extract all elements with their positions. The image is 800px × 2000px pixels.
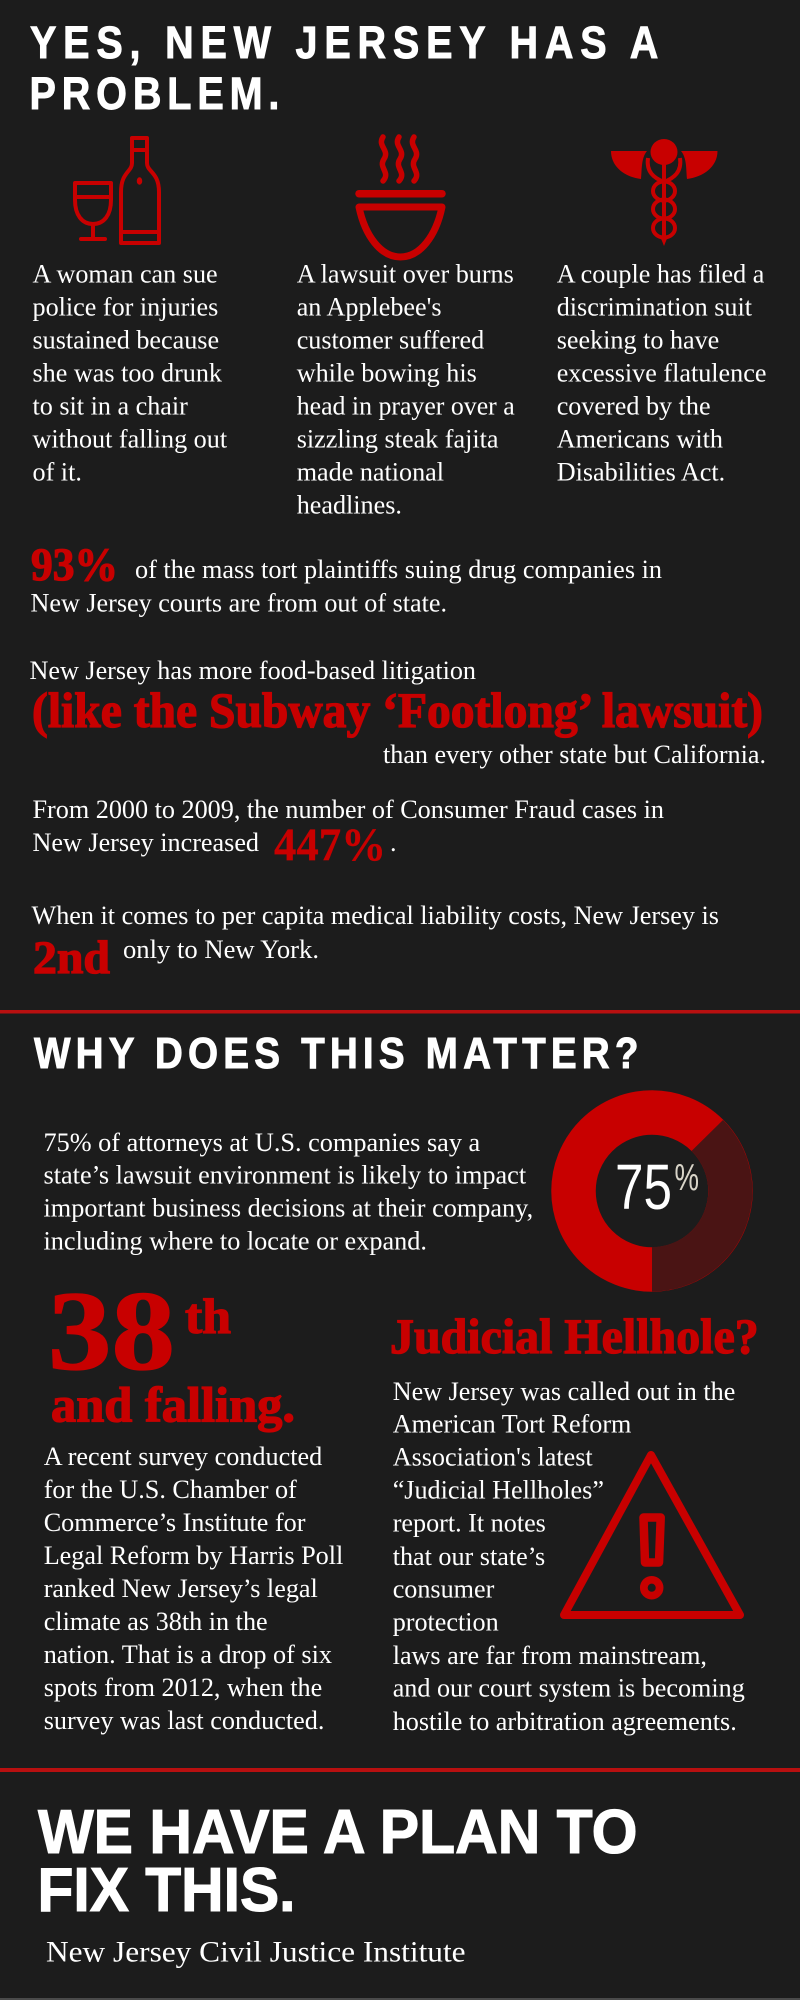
stat: 447 percent: From 2000 to 2009, the number of Consumer Fraud cases in xyxy=(32,795,664,824)
stat: 93 percent: of the mass tort plaintiffs suing drug companies in xyxy=(135,555,662,584)
stat: 93 percent: 93% xyxy=(31,539,118,591)
panel: the problem xyxy=(30,18,766,984)
text: flatulence suit: Disabilities Act. xyxy=(557,457,725,486)
stat: food-based litigation xyxy=(30,656,766,769)
text: applebee's lawsuit: headlines. xyxy=(297,490,402,519)
text: flatulence suit: discrimination suit xyxy=(557,292,753,321)
text: harris poll survey: Legal Reform by Harris Poll xyxy=(44,1541,343,1570)
text: harris poll survey: A recent survey conducted xyxy=(44,1442,322,1471)
text: applebee's lawsuit: A lawsuit over burns xyxy=(297,259,514,288)
heading: why does this matter: WHY DOES THIS MATTER? xyxy=(34,1028,639,1078)
text: judicial hellholes report: laws are far from mainstream, xyxy=(393,1641,707,1670)
text: woman sues police: police for injuries xyxy=(32,292,218,321)
stat: 38th and falling: th xyxy=(185,1288,231,1344)
stat: 447 percent: New Jersey increased xyxy=(32,828,259,857)
chart: 75 percent donut: 75 xyxy=(615,1151,672,1223)
icon: warning triangle xyxy=(564,1455,740,1615)
text: flatulence suit: covered by the xyxy=(557,391,711,420)
text: judicial hellholes report: American Tort Reform xyxy=(393,1410,631,1439)
text: 75 percent of attorneys: state’s lawsuit environment is likely to impact xyxy=(44,1161,527,1190)
text: harris poll survey: ranked New Jersey’s legal xyxy=(44,1574,318,1603)
stat: 447 percent xyxy=(32,795,664,871)
text: harris poll survey: Commerce’s Institute for xyxy=(44,1508,306,1537)
heading: yes, new jersey has a problem: PROBLEM. xyxy=(30,69,279,119)
text: woman sues police: of it. xyxy=(32,457,82,486)
text: flatulence suit: excessive flatulence xyxy=(557,358,766,387)
text: judicial hellholes report: protection xyxy=(393,1608,499,1637)
text: harris poll survey: climate as 38th in the xyxy=(44,1607,268,1636)
heading: we have a plan to fix this: FIX THIS. xyxy=(38,1856,296,1925)
stat: 38th and falling: 38 xyxy=(48,1269,175,1394)
icon: wine glass and bottle xyxy=(75,138,159,243)
text: 75 percent of attorneys: including where to locate or expand. xyxy=(44,1226,427,1255)
text: applebee's lawsuit: an Applebee's xyxy=(297,292,442,321)
heading: yes, new jersey has a problem xyxy=(30,18,658,119)
icon: caduceus xyxy=(611,139,718,246)
stat: 447 percent: 447% xyxy=(274,819,386,871)
stat: 38th and falling: and falling. xyxy=(51,1377,295,1433)
text: 75 percent of attorneys: important business decisions at their company, xyxy=(44,1194,533,1222)
text: judicial hellholes report: that our state’s xyxy=(393,1542,545,1571)
text: judicial hellholes report: report. It notes xyxy=(393,1509,546,1538)
text: flatulence suit: seeking to have xyxy=(557,325,719,354)
text: applebee's lawsuit: while bowing his xyxy=(297,358,477,387)
stat: 2nd in medical liability costs: only to New York. xyxy=(123,935,319,964)
text: judicial hellholes report: “Judicial Hellholes” xyxy=(393,1475,604,1504)
heading: we have a plan to fix this: WE HAVE A PLAN TO xyxy=(38,1798,638,1867)
text: applebee's lawsuit: made national xyxy=(297,457,444,486)
text: 75 percent of attorneys: 75% of attorneys at U.S. companies say a xyxy=(44,1128,481,1157)
stat: food-based litigation: (like the Subway ‘Footlong’ lawsuit) xyxy=(32,682,763,738)
panel: why does this matter xyxy=(34,1028,759,1736)
heading: yes, new jersey has a problem: YES, NEW JERSEY HAS A xyxy=(30,18,658,68)
text: judicial hellholes report: New Jersey was called out in the xyxy=(393,1377,735,1406)
chart: 75 percent donut xyxy=(574,1112,752,1292)
icon: steaming bowl xyxy=(359,137,442,257)
text: flatulence suit: A couple has filed a xyxy=(557,259,765,288)
text: harris poll survey: spots from 2012, when the xyxy=(44,1673,322,1702)
text: judicial hellholes report: consumer xyxy=(393,1575,495,1604)
text: flatulence suit: Americans with xyxy=(557,424,723,453)
text: organisation name: New Jersey Civil Justice Institute xyxy=(46,1936,466,1969)
text: woman sues police: A woman can sue xyxy=(32,259,218,288)
text: judicial hellholes report: and our court system is becoming xyxy=(393,1674,745,1703)
text: harris poll survey: nation. That is a drop of six xyxy=(44,1640,332,1669)
stat: 2nd in medical liability costs: 2nd xyxy=(33,932,110,984)
stat: 447 percent: . xyxy=(390,828,397,857)
text: woman sues police: to sit in a chair xyxy=(32,391,188,420)
panel: we have a plan xyxy=(38,1798,638,1969)
stat: 2nd in medical liability costs xyxy=(32,901,719,984)
text: applebee's lawsuit: customer suffered xyxy=(297,325,484,354)
text: applebee's lawsuit: head in prayer over a xyxy=(297,391,515,420)
text: judicial hellholes report: hostile to arbitration agreements. xyxy=(393,1707,737,1736)
stat: food-based litigation: than every other state but California. xyxy=(383,740,766,769)
stat: 93 percent xyxy=(30,539,662,618)
text: woman sues police: sustained because xyxy=(32,325,219,354)
text: harris poll survey: survey was last conducted. xyxy=(44,1706,324,1735)
text: harris poll survey: for the U.S. Chamber of xyxy=(44,1475,297,1504)
stat: 93 percent: New Jersey courts are from out of state. xyxy=(30,588,447,618)
text: woman sues police: she was too drunk xyxy=(32,358,223,387)
stat: 2nd in medical liability costs: When it comes to per capita medical liability costs, New Jersey is xyxy=(32,901,719,930)
text: woman sues police: without falling out xyxy=(32,424,228,453)
stat: 38th and falling xyxy=(48,1269,295,1433)
text: applebee's lawsuit: sizzling steak fajita xyxy=(297,424,499,453)
text: judicial hellholes report: Association's latest xyxy=(393,1443,593,1472)
stat: food-based litigation: New Jersey has more food-based litigation xyxy=(30,656,476,685)
heading: we have a plan to fix this xyxy=(38,1798,638,1925)
chart: 75 percent donut: % xyxy=(674,1157,699,1199)
heading: judicial hellhole: Judicial Hellhole? xyxy=(390,1308,759,1364)
